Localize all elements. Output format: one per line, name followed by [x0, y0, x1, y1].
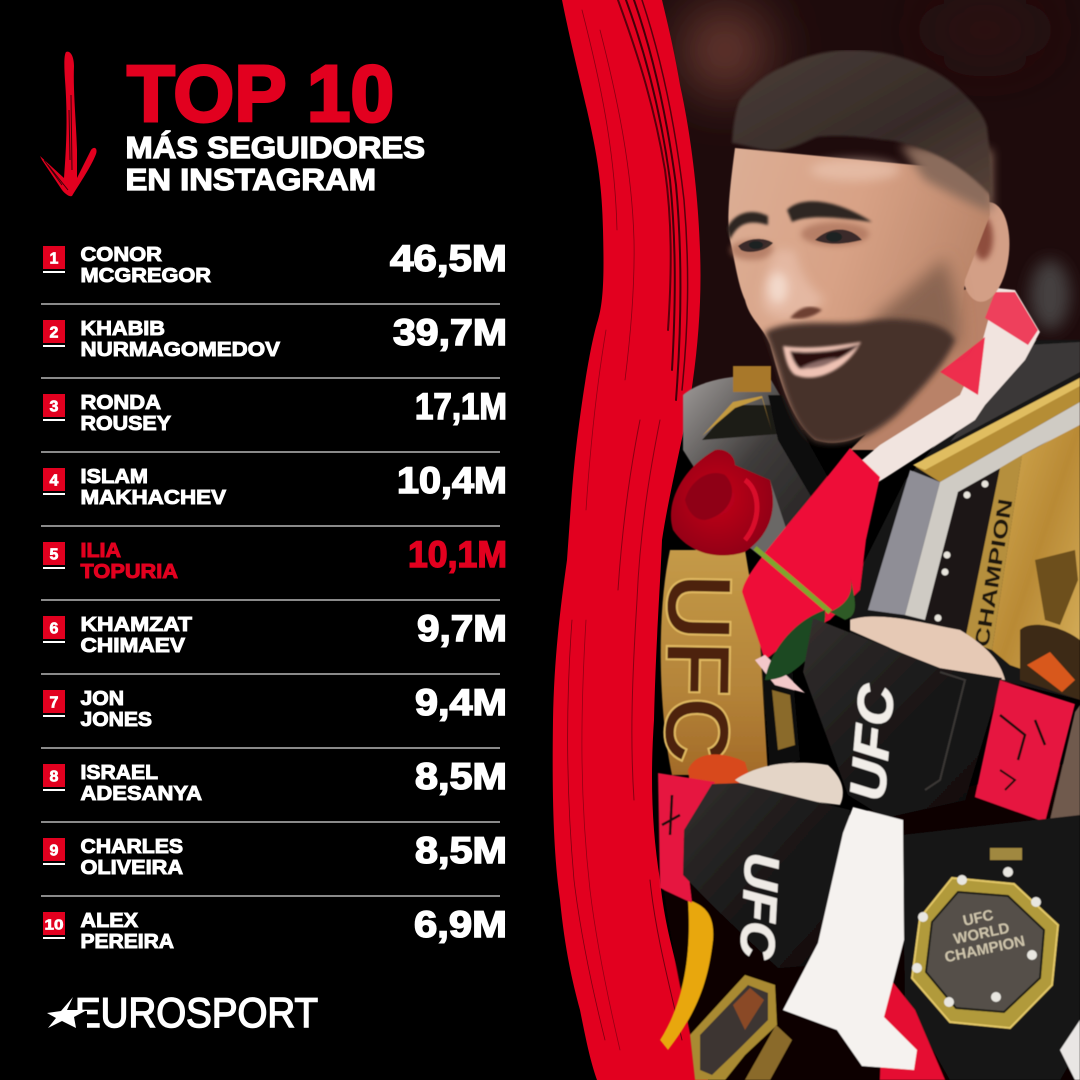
ranking row 6: KHAMZAT: [80, 613, 193, 636]
ranking row 8: [43, 756, 507, 805]
large medallion: CHAMPION: [943, 933, 1027, 966]
subtitle: [126, 130, 425, 197]
ranking row 2: 39,7M: [393, 312, 507, 353]
ranking row 3: [43, 386, 507, 435]
eyebrows: [727, 201, 872, 240]
ranking row 7: JON: [80, 687, 124, 710]
beard: [765, 319, 955, 444]
neck: [850, 280, 1005, 450]
leaf: [765, 610, 825, 680]
ranking row 8: 8,5M: [415, 756, 507, 797]
stem: [755, 548, 830, 612]
ranking row 3: RONDA: [80, 391, 161, 414]
ranking row 2: KHABIB: [80, 317, 165, 340]
head: [727, 50, 1014, 444]
lower photo backdrop: [660, 760, 1080, 1080]
eyes: [738, 230, 862, 252]
ranking row 4: ISLAM: [80, 465, 148, 488]
ranking row 6: [43, 608, 507, 657]
Eurosport logo: EUROSPORT: [75, 989, 318, 1036]
ranking row 4: [43, 460, 507, 509]
ranking row 1: [43, 238, 507, 287]
left belt silver and black: [683, 366, 835, 560]
photo background: blurred arena crowd: [655, 0, 1080, 430]
ranking row 2: 2: [50, 324, 59, 342]
ranking row 9: CHARLES: [80, 835, 183, 858]
gold clip: [990, 848, 1022, 860]
ranking row 5 highlighted: 10,1M: [408, 534, 507, 575]
face: [728, 148, 990, 443]
ranking row 8: 8: [50, 768, 59, 786]
ranking row 5 highlighted: 5: [50, 546, 59, 564]
ranking row 7: 9,4M: [415, 682, 507, 723]
ranking row 7: JONES: [80, 708, 152, 731]
red brush stroke: [553, 0, 708, 1080]
ranking row 9: OLIVEIRA: [80, 856, 183, 879]
lower glove: [683, 783, 850, 968]
ear: [956, 200, 1014, 304]
white towel: [783, 807, 917, 1070]
right champion belt: [850, 340, 1080, 700]
left gold UFC belt: [645, 550, 800, 785]
lower glove: UFC: [729, 851, 788, 961]
ranking row 6: 9,7M: [417, 608, 507, 649]
left gold UFC belt: UFC: [645, 573, 750, 764]
nose: [762, 250, 825, 319]
right champion belt: CHAMPION: [971, 497, 1017, 649]
ranking row 10: 10: [44, 916, 64, 934]
large medallion: WORLD: [952, 920, 1011, 948]
stubble edge of beard: [870, 258, 959, 347]
temple fade: [900, 145, 992, 212]
mouth: [783, 342, 861, 378]
ranking row 2: NURMAGOMEDOV: [80, 338, 280, 361]
ranking row 7: [43, 682, 507, 731]
ranking row 10: ALEX: [80, 909, 138, 932]
red flag piece: [880, 970, 945, 1080]
ranking row 10: PEREIRA: [80, 930, 174, 953]
red wrist tape upper: [975, 680, 1080, 825]
ranking row 1: MCGREGOR: [80, 264, 211, 287]
large medallion: [912, 867, 1058, 1028]
ranking row 10: 6,9M: [414, 904, 507, 945]
ranking row 4: 10,4M: [397, 460, 507, 501]
ranking row 6: 6: [50, 620, 59, 638]
ranking row 1: 46,5M: [390, 238, 507, 279]
ranking row 4: 4: [50, 472, 59, 490]
upper glove: [803, 618, 1002, 818]
ranking row 6: CHIMAEV: [80, 634, 185, 657]
hand wrap on lower glove: [735, 763, 843, 805]
eye socket shade: [730, 222, 869, 260]
ranking row 8: ADESANYA: [80, 782, 202, 805]
ranking row 9: [43, 830, 507, 879]
arrow pointing down: [40, 52, 97, 196]
subtitle: EN INSTAGRAM: [126, 163, 376, 197]
ranking row 7: 7: [50, 694, 59, 712]
hair: [732, 50, 992, 197]
title: TOP 10: TOP 10: [127, 49, 394, 138]
flag scarf: [742, 288, 1040, 693]
ranking row 9: 9: [50, 842, 59, 860]
red wrist tape lower: [658, 773, 715, 903]
ranking row 9: 8,5M: [415, 830, 507, 871]
ranking row 3: ROUSEY: [80, 412, 171, 435]
ranking row 2: [43, 312, 507, 361]
subtitle: MÁS SEGUIDORES: [126, 130, 425, 165]
ranking row 1: 1: [50, 250, 59, 268]
ranking row 8: ISRAEL: [80, 761, 158, 784]
lower small medallion: [690, 975, 792, 1080]
ranking row 3: 3: [50, 398, 59, 416]
forehead highlight: [810, 159, 900, 181]
lower right belt: [880, 815, 1080, 1080]
large medallion: UFC: [961, 907, 995, 930]
yellow ribbon: [660, 900, 713, 1050]
ranking row 5 highlighted: ILIA: [80, 539, 121, 562]
rose: [671, 450, 855, 680]
ranking row 3: 17,1M: [415, 386, 507, 427]
ranking row 1: CONOR: [80, 243, 162, 266]
ranking row 10: [43, 904, 507, 953]
upper glove: UFC: [839, 682, 905, 803]
hand wrap on upper glove: [850, 617, 1005, 680]
ranking row 4: MAKHACHEV: [80, 486, 226, 509]
ranking row 5 highlighted: [43, 534, 507, 583]
photo: fighter with belts, rose and gloves: [645, 50, 1080, 1080]
ranking row 5 highlighted: TOPURIA: [80, 560, 178, 583]
